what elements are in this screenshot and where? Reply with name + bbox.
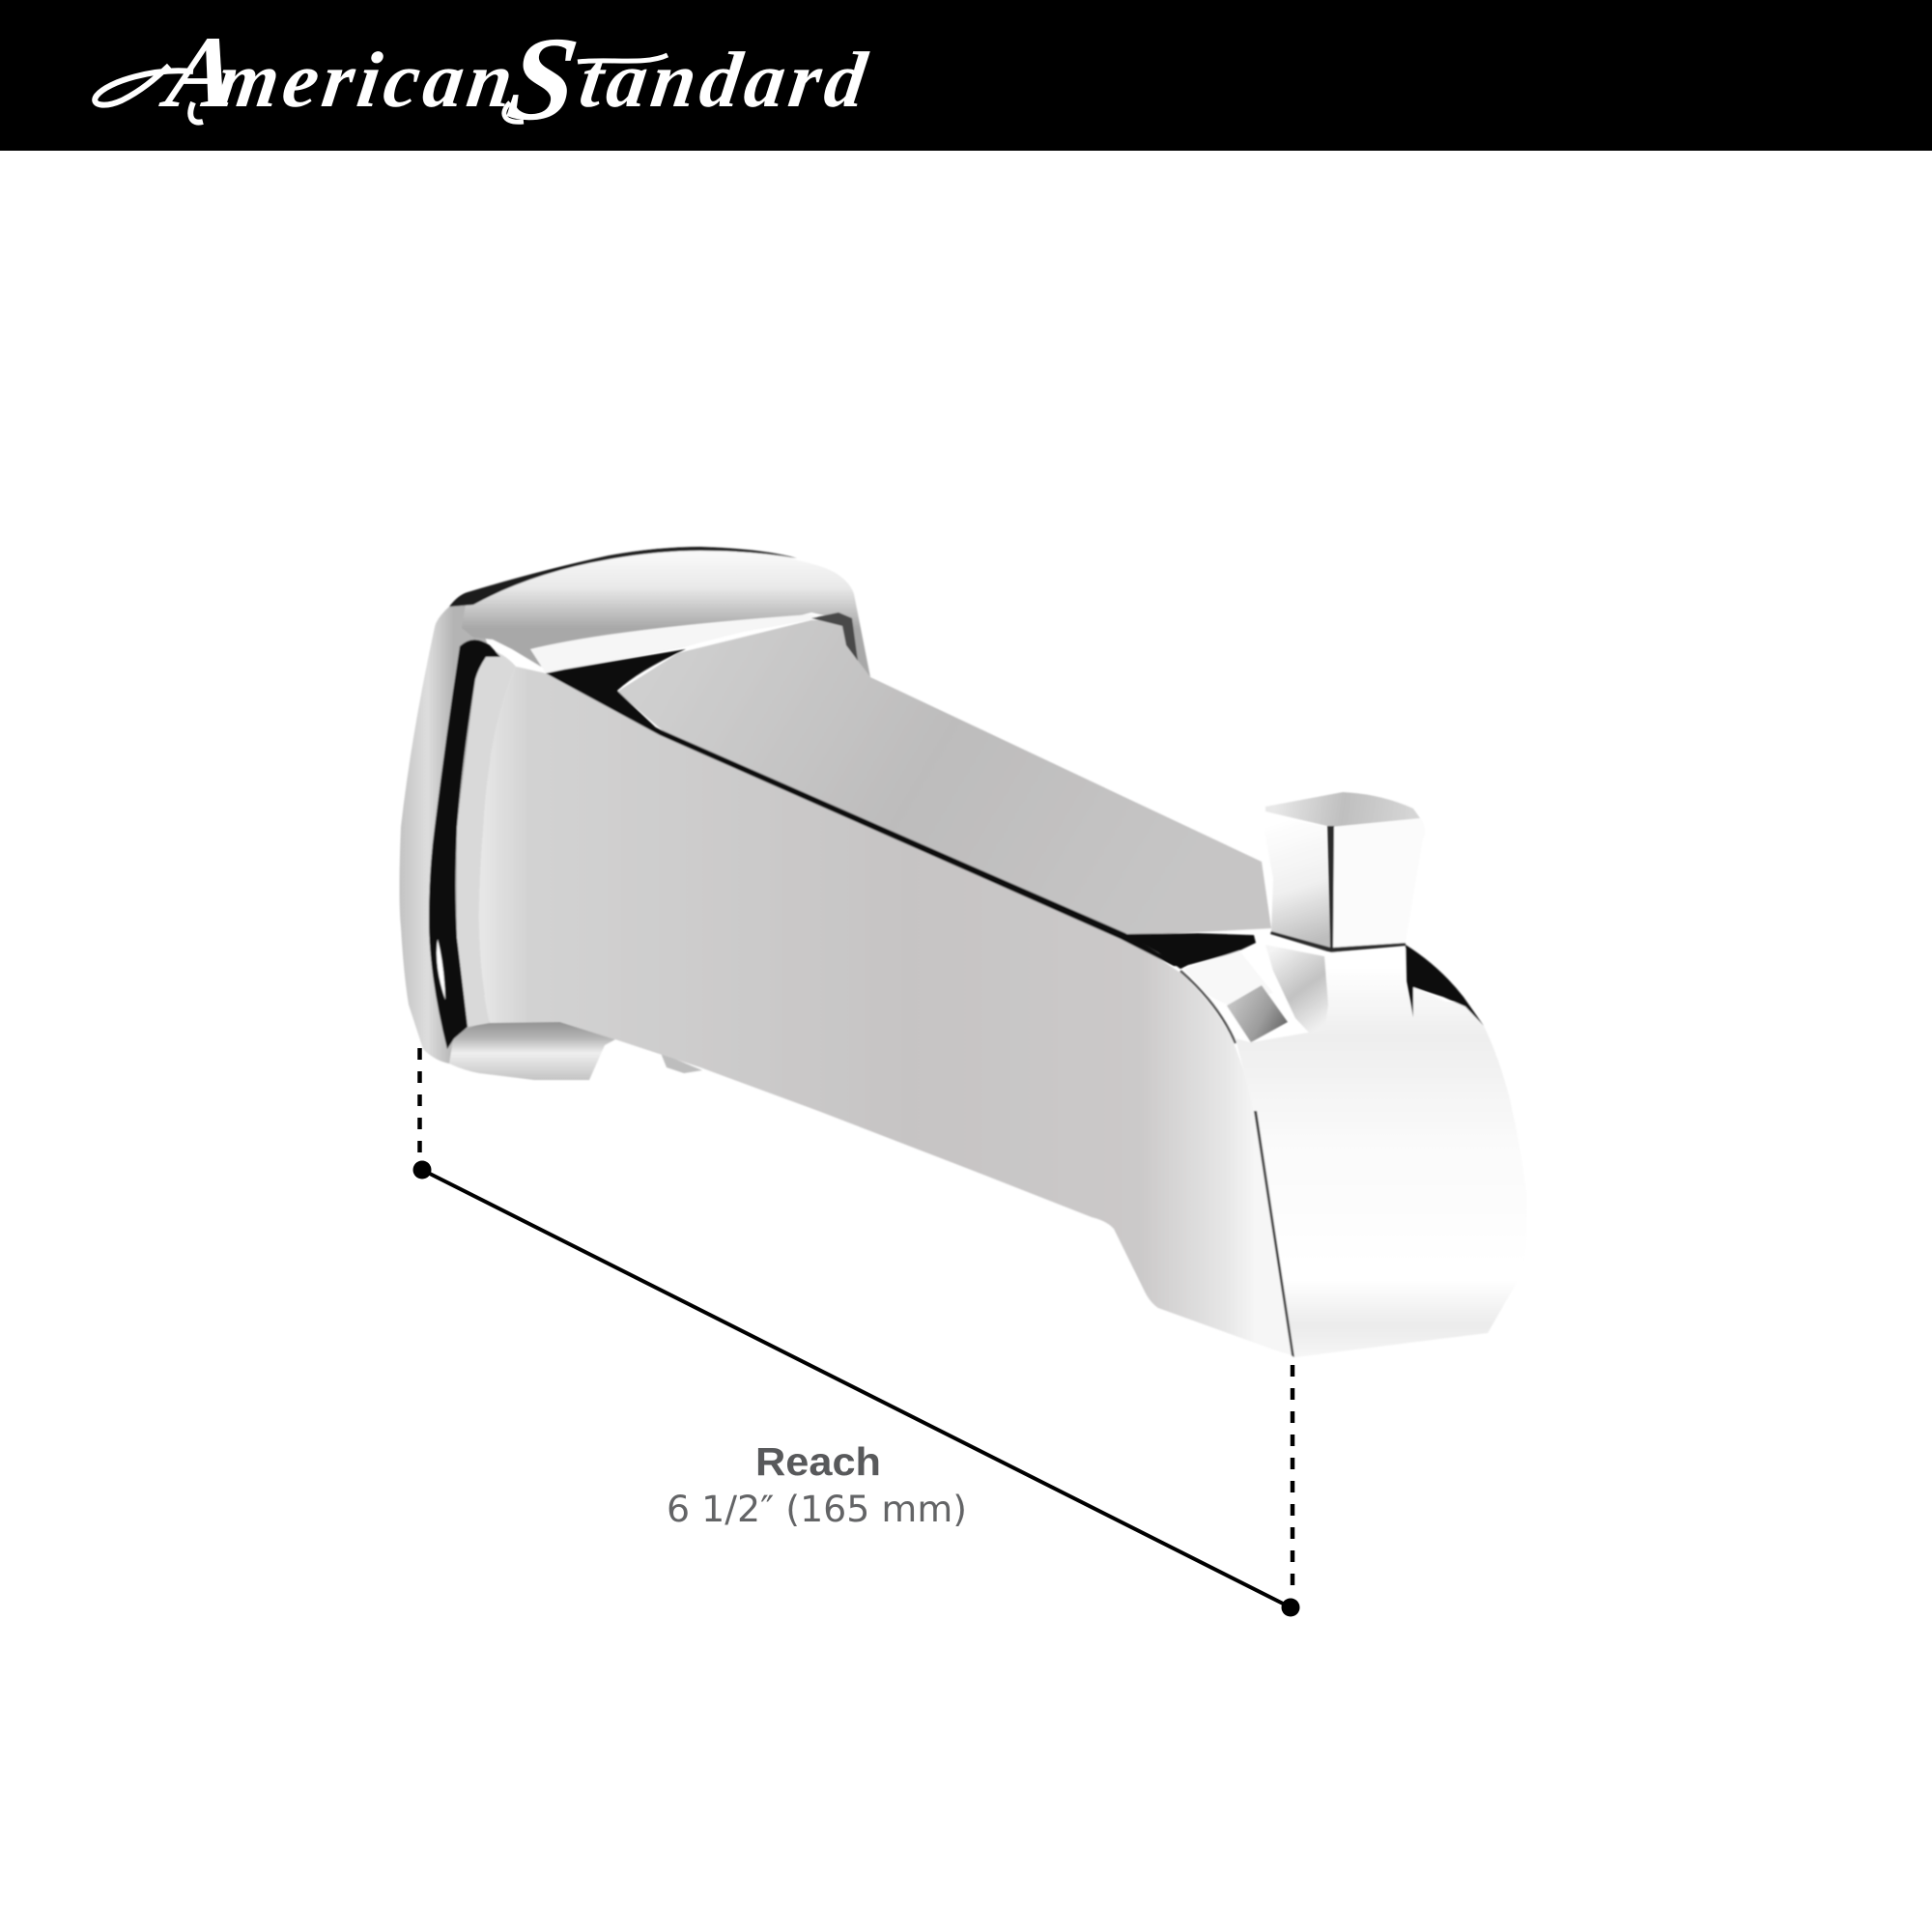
slot highlight <box>437 939 445 1000</box>
right dark rim <box>1406 945 1484 1026</box>
left endpoint <box>413 1161 431 1179</box>
right dashed guide <box>1291 1365 1294 1596</box>
label: Reach: Reach <box>755 1439 881 1484</box>
knob left face <box>1262 814 1330 949</box>
reach line <box>422 1170 1291 1607</box>
logo: American Standard: A <box>155 15 244 129</box>
logo: American Standard: tandard <box>575 36 876 124</box>
top collar <box>462 547 870 677</box>
main side face <box>479 667 1292 1355</box>
shoulder edge line <box>1180 971 1236 1043</box>
dark ridge line <box>546 673 1180 966</box>
knob stem <box>1265 945 1328 1034</box>
right endpoint <box>1281 1598 1300 1617</box>
tub spout <box>400 547 1527 1357</box>
dark wedge <box>546 649 686 731</box>
dark shoulder strip <box>1125 933 1256 969</box>
collar highlight <box>530 614 821 673</box>
header bar <box>0 0 1932 151</box>
logo: American Standard <box>92 13 876 145</box>
left dashed guide <box>417 1048 422 1163</box>
light strip beside collar <box>457 649 516 1027</box>
front end face <box>1236 949 1527 1357</box>
shoulder recess <box>1227 985 1288 1042</box>
upper spout face <box>617 620 1271 934</box>
knob right face <box>1331 818 1425 949</box>
back plate edge <box>400 592 493 1064</box>
dark collar band <box>429 639 500 1049</box>
dimension: reach <box>413 1048 1300 1617</box>
knob top face <box>1265 792 1420 827</box>
knob edges <box>1270 826 1406 952</box>
bottom collar lip <box>449 1019 615 1080</box>
collar right shadow <box>811 612 858 661</box>
front edge line <box>1254 1111 1294 1357</box>
value: 6 1/2 inch (165 mm): 6 1/2″ (165 mm) <box>667 1488 967 1530</box>
shoulder highlight <box>1184 951 1273 1006</box>
collar top shadow <box>449 547 797 607</box>
mounting nub <box>661 1053 702 1073</box>
pop-up knob <box>1262 792 1425 952</box>
logo: American Standard: merican <box>212 36 523 124</box>
logo: American Standard: S <box>500 13 585 145</box>
